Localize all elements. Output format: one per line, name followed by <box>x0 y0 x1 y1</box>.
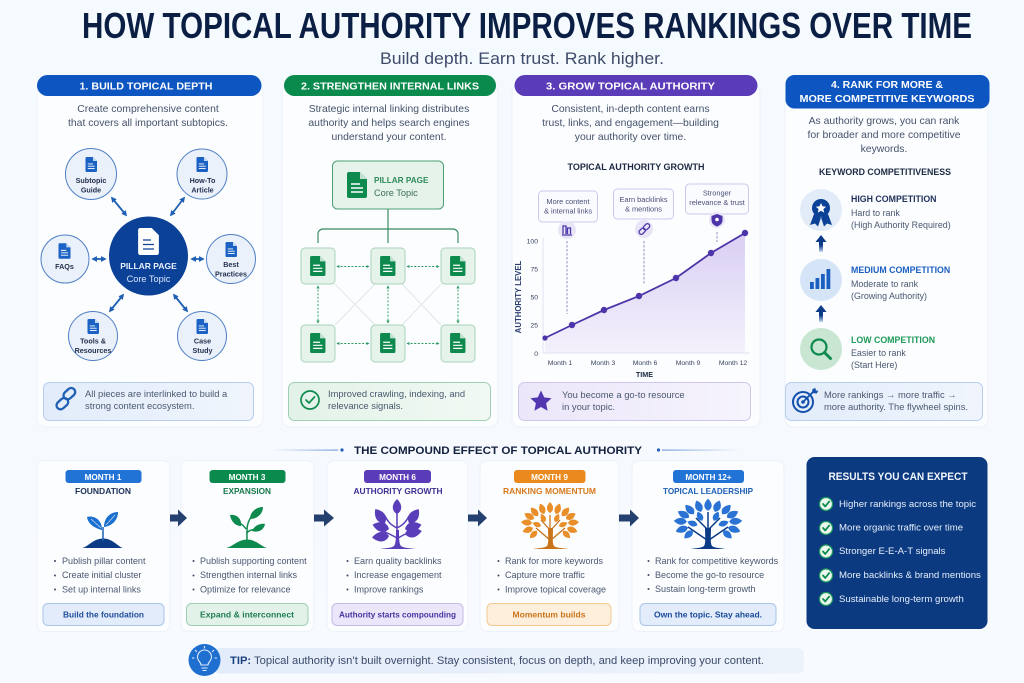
y axis title: AUTHORITY LEVEL <box>514 260 523 333</box>
node: how-to article <box>177 149 227 199</box>
badge: month 9 <box>514 470 586 483</box>
arrow: up to medium <box>816 305 826 322</box>
takeaway: Expand & interconnect <box>200 610 294 620</box>
note: backlinks: Earn backlinks <box>619 195 668 204</box>
callout: go-to resource: You become a go-to resource <box>562 389 685 400</box>
callout: flywheel: More rankings → more traffic → <box>824 389 957 400</box>
connector lines <box>318 209 458 243</box>
note: more content <box>538 191 598 239</box>
bullets: Rank for more keywords <box>505 556 604 566</box>
arrow: 3 to 4 <box>468 510 487 526</box>
x axis labels: Month 9 <box>676 360 700 367</box>
badge: month 12+: MONTH 12+ <box>685 473 732 482</box>
callout: crawling: Improved crawling, indexing, and <box>328 388 465 399</box>
note: relevance: Stronger <box>703 188 732 198</box>
node: pillar page: Core Topic <box>127 274 171 284</box>
bullets: Sustain long-term growth <box>655 584 756 594</box>
callout: crawling: relevance signals. <box>328 400 403 411</box>
stage title: AUTHORITY GROWTH <box>354 486 442 496</box>
result: rankings: Higher rankings across the topic <box>839 499 976 510</box>
badge: month 9: MONTH 9 <box>531 473 568 482</box>
text: panel 4 description: for broader and more competitive <box>807 130 961 141</box>
y axis labels: 25 <box>530 322 538 330</box>
callout: crawling <box>288 382 490 420</box>
callout: go-to resource <box>518 382 750 420</box>
takeaway: Own the topic. Stay ahead. <box>654 610 762 620</box>
bullets <box>54 556 146 594</box>
node: subtopic guide: Guide <box>81 186 101 194</box>
text: panel 4 description: keywords. <box>861 144 907 155</box>
tip banner <box>188 644 804 676</box>
level: high competition: (High Authority Required) <box>851 220 951 230</box>
node: tools and resources: Tools & <box>80 336 106 346</box>
level: high competition: HIGH COMPETITION <box>851 194 937 204</box>
callout: flywheel <box>786 382 982 420</box>
x axis labels <box>548 360 747 367</box>
callout: interlinked: strong content ecosystem. <box>85 400 194 411</box>
y axis labels: 100 <box>527 238 538 246</box>
takeaway <box>43 604 164 626</box>
bullets: Optimize for relevance <box>200 584 291 594</box>
level: low competition: (Start Here) <box>851 360 897 370</box>
node: tools and resources <box>68 312 118 360</box>
box: pillar page: Core Topic <box>374 188 418 198</box>
section heading: compound effect: THE COMPOUND EFFECT OF TOPICAL AUTHORITY <box>354 445 643 457</box>
level: high competition <box>800 189 951 231</box>
text: panel 2 description: understand your content. <box>332 132 446 143</box>
bullets: Improve rankings <box>354 584 424 594</box>
level: medium competition: Moderate to rank <box>851 279 919 289</box>
level: high competition: Hard to rank <box>851 208 900 218</box>
heading: build topical depth <box>37 75 262 96</box>
y axis labels <box>527 238 538 358</box>
note: more content: & internal links <box>544 206 592 216</box>
note: backlinks: & mentions <box>625 204 662 214</box>
level: medium competition: (Growing Authority) <box>851 291 927 301</box>
bullets <box>346 556 442 594</box>
x axis labels: Month 12 <box>719 360 747 367</box>
line series <box>542 230 748 341</box>
icon: orange tree <box>521 502 579 549</box>
result: backlinks: More backlinks & brand mentions <box>839 570 981 581</box>
node: case study: Case <box>194 336 211 346</box>
supporting pages <box>301 248 475 362</box>
tip text: TIP: Topical authority isn’t built overnight. Stay consistent, focus on depth, and keep improving your content. <box>230 655 764 667</box>
box: pillar page <box>332 161 444 209</box>
bullets: Increase engagement <box>354 570 442 580</box>
heading: grow topical authority: 3. GROW TOPICAL AUTHORITY <box>546 80 715 92</box>
arrow: 1 to 2 <box>170 510 187 526</box>
chart: topical authority growth <box>514 162 750 379</box>
x axis labels: Month 3 <box>591 360 615 367</box>
text: panel 2 description: authority and helps search engines <box>308 118 470 129</box>
takeaway: Momentum builds <box>512 610 586 620</box>
badge: month 1: MONTH 1 <box>85 473 122 482</box>
note: more content: More content <box>546 197 590 206</box>
bullets: Publish pillar content <box>62 556 146 566</box>
dashed guides <box>567 232 717 314</box>
badge: month 3: MONTH 3 <box>229 473 266 482</box>
takeaway <box>186 604 308 626</box>
result: growth: Sustainable long-term growth <box>839 594 964 605</box>
bullets: Capture more traffic <box>505 570 585 580</box>
node: tools and resources: Resources <box>75 346 111 355</box>
badge: month 6 <box>364 470 431 483</box>
heading: rank for more keywords: MORE COMPETITIVE KEYWORDS <box>800 93 974 105</box>
node: best practices: Practices <box>215 270 247 278</box>
stage title: RANKING MOMENTUM <box>503 486 596 496</box>
node: case study: Study <box>193 346 212 355</box>
badge: month 6: MONTH 6 <box>379 473 416 482</box>
bullets <box>498 556 606 594</box>
takeaway <box>640 604 776 626</box>
diagram: hub and spoke <box>41 148 256 360</box>
card: month 6 <box>327 460 468 632</box>
arrow: 4 to 5 <box>619 510 639 526</box>
text: panel 3 description: trust, links, and engagement—building <box>542 118 719 129</box>
heading: strengthen internal links: 2. STRENGTHEN INTERNAL LINKS <box>301 80 479 92</box>
note: relevance: relevance & trust <box>689 198 745 207</box>
text: panel 1 description: that covers all important subtopics. <box>68 118 228 129</box>
bullets: Improve topical coverage <box>505 584 606 594</box>
panel: results you can expect <box>806 457 988 629</box>
takeaway: Build the foundation <box>63 610 144 620</box>
heading: rank for more keywords: 4. RANK FOR MORE & <box>831 79 943 91</box>
panel: rank for more keywords <box>785 75 990 427</box>
heading: build topical depth: 1. BUILD TOPICAL DEPTH <box>80 80 212 92</box>
box: pillar page: PILLAR PAGE <box>374 176 429 185</box>
heading: grow topical authority <box>514 75 758 96</box>
chart title: TOPICAL AUTHORITY GROWTH <box>568 162 704 172</box>
stage title: EXPANSION <box>223 486 271 496</box>
node: how-to article: How-To <box>190 176 216 185</box>
card: month 3 <box>181 460 314 632</box>
callout: flywheel: more authority. The flywheel spins. <box>824 401 968 412</box>
node: subtopic guide: Subtopic <box>76 176 106 185</box>
callout: interlinked <box>44 382 254 420</box>
card: month 9 <box>480 460 619 632</box>
bullets: Become the go-to resource <box>655 570 764 580</box>
card: month 12+ <box>632 460 784 632</box>
badge: month 12+ <box>673 470 744 483</box>
icon: light bulb <box>192 646 217 670</box>
panel: build topical depth <box>37 75 263 427</box>
takeaway <box>487 604 611 626</box>
badge: month 1 <box>66 470 142 483</box>
node: pillar page <box>109 216 188 296</box>
level: low competition: Easier to rank <box>851 348 906 358</box>
card: month 1 <box>37 460 170 632</box>
x axis labels: Month 1 <box>548 360 572 367</box>
callout: interlinked: All pieces are interlinked to build a <box>85 388 228 399</box>
bullets <box>648 556 779 594</box>
level: low competition <box>800 328 935 370</box>
diagram: link structure <box>301 161 475 362</box>
bullets: Rank for competitive keywords <box>655 556 779 566</box>
result: eeat: Stronger E-E-A-T signals <box>839 546 946 557</box>
node: case study <box>178 312 226 360</box>
note: backlinks <box>614 189 674 238</box>
arrows: pillar links <box>93 198 203 311</box>
subtitle: Build depth. Earn trust. Rank higher. <box>380 49 664 68</box>
heading: rank for more keywords <box>786 75 990 108</box>
text: panel 2 description: Strategic internal linking distributes <box>309 104 469 115</box>
arrow: 2 to 3 <box>314 510 334 526</box>
level: medium competition <box>800 259 950 301</box>
bullets: Create initial cluster <box>62 570 141 580</box>
panel: strengthen internal links <box>282 75 498 427</box>
node: how-to article: Article <box>191 186 214 194</box>
y axis labels: 0 <box>534 351 538 358</box>
icon: young plant <box>226 507 267 548</box>
text: panel 1 description: Create comprehensive content <box>77 104 219 115</box>
icon: sprout <box>82 512 123 548</box>
node: subtopic guide <box>66 148 116 200</box>
result: traffic: More organic traffic over time <box>839 522 963 534</box>
level: medium competition: MEDIUM COMPETITION <box>851 265 950 275</box>
x axis title: TIME <box>636 370 653 379</box>
bullets: Publish supporting content <box>200 556 307 566</box>
y axis labels: 50 <box>530 294 538 302</box>
text: panel 3 description: your authority over time. <box>575 132 686 143</box>
takeaway: Authority starts compounding <box>339 610 456 620</box>
stage title: FOUNDATION <box>75 486 131 496</box>
dashed links <box>318 266 458 344</box>
text: panel 4 description: As authority grows, you can rank <box>809 116 960 127</box>
node: faqs: FAQs <box>55 262 74 271</box>
level: low competition: LOW COMPETITION <box>851 335 935 345</box>
note: relevance <box>686 184 748 228</box>
subheading: keyword competitiveness: KEYWORD COMPETITIVENESS <box>819 167 951 177</box>
bullets: Strengthen internal links <box>200 570 298 580</box>
bullets <box>192 556 307 594</box>
callout: go-to resource: in your topic. <box>562 401 615 412</box>
bullets: Set up internal links <box>62 584 141 594</box>
node: faqs <box>41 235 89 283</box>
y axis labels: 75 <box>530 266 538 274</box>
x axis labels: Month 6 <box>633 360 657 367</box>
area <box>545 233 745 353</box>
node: best practices <box>206 234 256 284</box>
arrow: up to high <box>816 235 826 252</box>
icon: blue tree <box>674 499 742 549</box>
node: best practices: Best <box>223 260 239 269</box>
panel: grow topical authority <box>512 75 760 427</box>
section heading: compound effect <box>272 445 740 457</box>
heading: strengthen internal links <box>284 75 496 96</box>
badge: month 3 <box>210 470 286 483</box>
takeaway <box>332 604 463 626</box>
node: pillar page: PILLAR PAGE <box>120 261 177 271</box>
icon: sapling <box>371 499 423 549</box>
bullets: Earn quality backlinks <box>354 556 442 566</box>
stage title: TOPICAL LEADERSHIP <box>663 486 753 496</box>
text: panel 3 description: Consistent, in-depth content earns <box>551 104 710 115</box>
results heading: RESULTS YOU CAN EXPECT <box>828 471 968 483</box>
